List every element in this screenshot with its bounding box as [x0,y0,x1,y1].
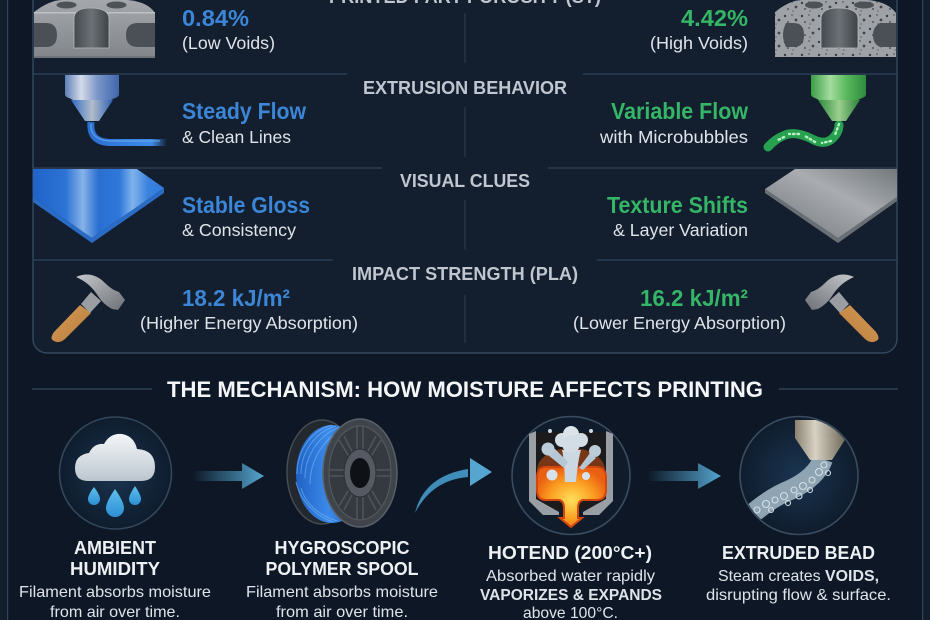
step 3 text: hotend: Absorbed water rapidly [486,568,655,585]
icon: left hammer [52,275,125,342]
panel: comparison table [33,0,897,353]
step 2 text: hygroscopic polymer spool: HYGROSCOPIC [274,537,410,558]
step 2 text: hygroscopic polymer spool [246,537,438,620]
step 2 text: hygroscopic polymer spool: Filament absorbs moisture [246,584,438,601]
stat: low porosity: (Low Voids) [182,33,275,53]
text: stable gloss: & Consistency [182,220,296,240]
step 2 text: hygroscopic polymer spool: POLYMER SPOOL [266,558,418,579]
text: steady flow: Steady Flow [182,98,306,124]
arrow: hotend to bead [647,463,721,489]
stat: high porosity: (High Voids) [650,33,748,53]
step 1 text: ambient humidity: Filament absorbs moisture [19,584,211,601]
stat: low porosity: 0.84% [182,5,249,31]
step 1 text: ambient humidity: HUMIDITY [70,558,161,579]
stat: low porosity [182,5,275,53]
icon: glossy blue sample [33,169,164,243]
icon: textured grey sample [765,169,897,243]
text: texture shifts: & Layer Variation [613,220,748,240]
stat: high porosity: 4.42% [681,5,748,31]
text: texture shifts [607,192,748,240]
text: texture shifts: Texture Shifts [607,192,748,218]
step 4 text: extruded bead [706,542,891,604]
icon: porous printed part [775,0,896,57]
text: variable flow [599,98,748,147]
heading: extrusion behavior: EXTRUSION BEHAVIOR [363,78,567,98]
text: higher impact strength: 18.2 kJ/m² [182,285,290,311]
text: variable flow: Variable Flow [611,98,748,124]
text: steady flow: & Clean Lines [182,127,291,147]
text: variable flow: with Microbubbles [599,127,748,147]
text: higher impact strength: (Higher Energy Absorption) [140,313,358,333]
text: lower impact strength [573,285,786,333]
text: stable gloss: Stable Gloss [182,192,310,218]
icon: solid printed part [34,0,155,58]
heading: visual clues: VISUAL CLUES [400,171,530,191]
icon: filament spool [287,419,397,527]
icon: hotend vaporizing [512,416,630,534]
step 1 text: ambient humidity [19,537,211,620]
heading: impact strength: IMPACT STRENGTH (PLA) [352,264,578,284]
step 3 text: hotend: HOTEND (200°C+) [488,542,652,563]
title: the mechanism: THE MECHANISM: HOW MOISTURE AFFECTS PRINTING [167,377,763,402]
stat: high porosity [650,5,748,53]
step 3 text: hotend: VAPORIZES & EXPANDS [480,587,662,604]
step 4 text: extruded bead: disrupting flow & surface. [706,587,891,604]
icon: right hammer [805,275,878,342]
arrow: curved spool to hotend [415,458,492,513]
text: stable gloss [182,192,310,240]
step 1 text: ambient humidity: AMBIENT [74,537,157,558]
icon: rain cloud [60,417,172,529]
step 4 text: extruded bead: EXTRUDED BEAD [722,542,875,563]
text: steady flow [182,98,306,147]
text: lower impact strength: (Lower Energy Absorption) [573,313,786,333]
step 3 text: hotend [480,542,662,620]
text: lower impact strength: 16.2 kJ/m² [640,285,748,311]
icon: blue nozzle steady flow [65,75,167,142]
arrow: humidity to spool [192,463,264,489]
icon: extruded bead with voids [740,416,858,534]
icon: green nozzle variable flow [768,75,866,147]
text: higher impact strength [140,285,358,333]
step 4 text: extruded bead: Steam creates VOIDS, [718,568,879,585]
